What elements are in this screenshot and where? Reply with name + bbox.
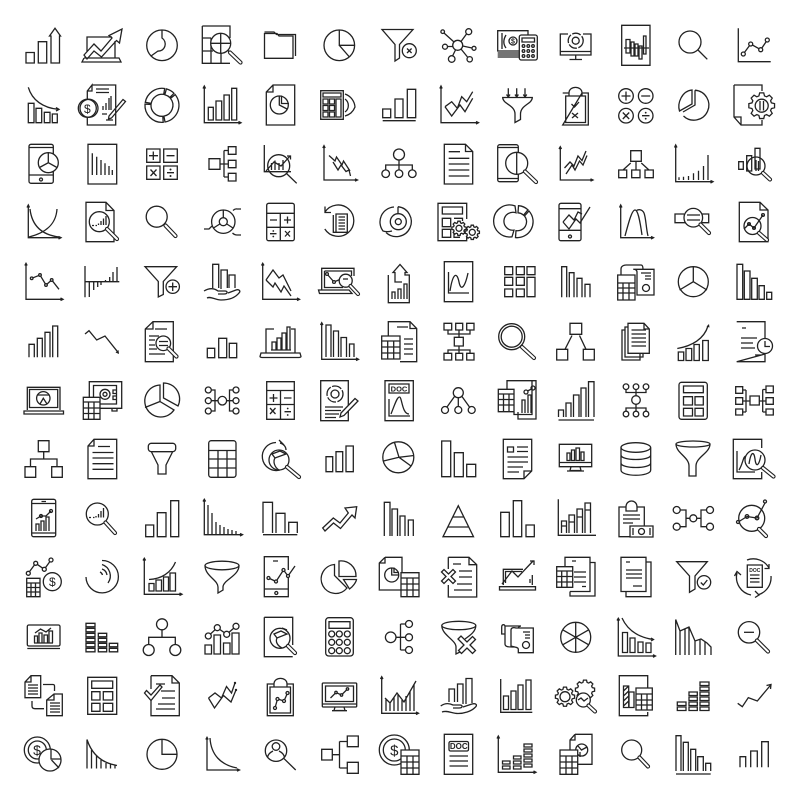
icon: falling curve chart [617, 618, 656, 657]
icon: funnel with check [677, 562, 711, 592]
icon: funnel with cross [382, 30, 416, 61]
icon: segmented donut ring [494, 205, 533, 238]
icon: three bar chart [207, 338, 237, 358]
icon: node branches [673, 506, 714, 530]
icon: checklist document [144, 676, 179, 716]
icon: rising line arrow [738, 684, 771, 707]
icon: coin with pie: $ [33, 742, 41, 758]
icon: calculator tiles [88, 677, 117, 714]
icon: DOC report with curve [385, 381, 413, 421]
icon: funnel [676, 441, 710, 476]
icon: monitor with donut [560, 33, 591, 60]
icon: three descending bars with baseline [263, 502, 297, 535]
icon: wheel chart [561, 622, 591, 652]
icon: exploded pie chart [321, 561, 356, 593]
icon: network hub [441, 29, 476, 62]
icon: gears with magnifier [555, 680, 595, 712]
icon: bar chart with baseline [383, 89, 416, 121]
icon: line chart falling [25, 263, 63, 300]
icon: document with magnifier [86, 202, 117, 242]
icon: stacked bar chart [558, 499, 596, 535]
icon: text document [444, 144, 473, 184]
icon: double trend chart [440, 86, 478, 124]
icon: calculator with tiles [679, 382, 707, 419]
icon: calculator with report [618, 265, 654, 300]
icon: hierarchy squares [322, 736, 358, 773]
icon: keypad calculator [326, 618, 353, 656]
icon: node tree branches [385, 620, 412, 654]
icon: rising spike chart [674, 145, 713, 183]
icon: document with pie and table [379, 557, 419, 597]
icon: magnifier [679, 31, 707, 59]
icon: laptop with trend [500, 560, 536, 590]
icon: donut chart [147, 30, 177, 61]
icon: funnel with X [442, 621, 476, 654]
icon: tall descending bars [442, 441, 476, 477]
icon: bars with magnifier [739, 148, 770, 180]
icon: pyramid [443, 506, 474, 537]
icon: laptop with bars [260, 327, 301, 358]
icon: clipboard with check and cross [563, 87, 588, 125]
icon: pie chart with wedge [679, 90, 709, 120]
icon: spreadsheet with document [382, 322, 417, 362]
icon: report with hatched bar and table [619, 676, 652, 716]
icon: report with curve magnifier [733, 439, 774, 479]
icon: DOC report with curve: DOC [391, 384, 408, 394]
icon: descending closed bars [737, 264, 772, 299]
icon: stacked pages [621, 557, 651, 597]
icon: tree with circles [442, 388, 475, 414]
icon: calculator coin and chart: $ [49, 575, 56, 589]
icon: magnifier with dots [86, 503, 115, 533]
icon: document cycle: DOC [749, 568, 761, 574]
icon: exploded pie [145, 383, 180, 417]
icon: large magnifier [499, 324, 534, 358]
icon: phone with growth chart [32, 499, 56, 537]
icon: funnel with lid [148, 443, 176, 474]
icon: three ascending bars [146, 501, 179, 537]
icon: report with pencil [321, 381, 358, 421]
icon: monitor with chart [322, 683, 357, 711]
icon: folder [264, 32, 296, 58]
icon: double zigzag [208, 682, 237, 708]
icon: database cylinder [621, 443, 651, 475]
icon: magnifier [622, 740, 648, 766]
icon: document with curve chart [444, 262, 473, 302]
icon: area chart with arrow [380, 677, 418, 715]
icon: document cycle [734, 559, 771, 598]
icon: laptop with pie [24, 387, 64, 414]
icon: triangle flow squares [557, 323, 594, 360]
icon: pie chart with slices [383, 442, 414, 473]
icon: dual falling trend chart [262, 263, 300, 300]
icon: descending bars [384, 502, 413, 536]
icon: ascending open bars [29, 326, 58, 357]
icon: hand holding bars [204, 264, 240, 300]
icon: coin with table: $ [390, 742, 399, 760]
icon: line chart with nodes [738, 28, 771, 62]
icon: document with table [560, 734, 592, 774]
icon: coin with table [379, 735, 419, 774]
icon: document with X [442, 557, 477, 597]
icon: rounded table [209, 441, 236, 477]
icon: safe with calculator [83, 382, 122, 419]
icon: document with clock [737, 322, 772, 362]
icon: display with bars and line [27, 625, 60, 648]
icon: bold rising arrow [323, 507, 357, 531]
icon: bar chart with line overlay [205, 623, 239, 654]
icon: chart under magnifier [264, 145, 297, 183]
icon: open bars descending [562, 267, 590, 297]
icon: falling trend chart [323, 146, 358, 181]
icon: magnifier thick handle [146, 206, 176, 236]
icon: phone with pie chart [29, 144, 58, 183]
icon: three mixed bars [501, 501, 534, 537]
icon: tree diagram with circles [623, 384, 649, 417]
icon: area spikes [676, 620, 711, 655]
icon: stacked documents [622, 323, 649, 360]
icon: growth curve and bars [677, 324, 710, 360]
icon: phone with trends [559, 203, 590, 241]
icon: table with magnifier [202, 26, 240, 63]
icon: pie with three slices [678, 267, 708, 297]
icon: document with upward arrow [388, 264, 409, 303]
icon: pie chart [324, 30, 355, 61]
icon: donut with connectors [204, 209, 241, 235]
icon: decay curve spikes [87, 740, 117, 768]
icon: scroll and report [502, 625, 533, 653]
icon: ascending bars with baseline [558, 382, 594, 420]
icon: concentric target [380, 207, 411, 237]
icon: stacked chart on axes [497, 736, 536, 774]
icon: DOC report [444, 734, 473, 774]
icon: organisation chart with circles [382, 149, 416, 178]
icon: node tree with circles [205, 387, 239, 414]
icon: magnifier with minus over cards [675, 208, 709, 233]
icon: funnel with plus [145, 267, 179, 297]
icon: three bars [326, 446, 353, 472]
icon: document with gear [734, 85, 775, 125]
icon: invoice, coin and pencil [78, 85, 126, 125]
icon: table and bar report [498, 381, 536, 419]
icon: document refresh [325, 205, 354, 236]
icon: positive and negative spikes [85, 266, 119, 297]
icon: org chart with squares [25, 441, 62, 477]
icon: segmented donut [145, 88, 179, 122]
icon: rising trend chart [559, 147, 593, 181]
icon: coin with pie [24, 737, 61, 771]
icon: calculator coin and chart [26, 558, 61, 597]
icon: invoice, coin and pencil: $ [84, 102, 91, 116]
icon: flow chart squares [619, 151, 653, 178]
icon: magnifier with line chart [736, 500, 766, 536]
icon: document with candlestick chart [622, 25, 650, 65]
icon: stacked blocks descending [86, 623, 118, 652]
icon: falling line arrow [85, 331, 119, 354]
icon: decay spikes on axis [203, 499, 242, 536]
icon: bell curves chart [620, 205, 654, 239]
icon: report with pie magnifier [264, 617, 295, 657]
icon: calculator with gears [438, 203, 479, 241]
icon: monitor with bars [559, 444, 592, 471]
icon: DOC report: DOC [450, 742, 468, 751]
icon: money and calculator [498, 31, 537, 60]
icon: tile grid [505, 267, 535, 297]
icon: calculator and partial donut [321, 91, 355, 119]
icon: pie with magnifier [262, 440, 299, 477]
icon: document [88, 439, 117, 479]
icon: document with pie [266, 85, 295, 125]
icon: crossing curves chart [27, 205, 61, 239]
icon: block diagram [444, 323, 474, 360]
icon: hierarchy diagram [209, 147, 236, 181]
icon: documents exchange [25, 676, 62, 716]
icon: laptop with rising arrow [82, 29, 122, 62]
icon: calculator operator keys [147, 149, 177, 179]
icon: hand with bars [441, 678, 476, 714]
icon: calculator [267, 382, 294, 419]
icon: three open bars [740, 742, 768, 767]
icon: clipboard with chart [267, 678, 293, 716]
icon: calculator [267, 203, 294, 241]
icon: laptop with magnifier [318, 268, 358, 294]
icon: bar chart with axes [203, 86, 241, 124]
icon: tablet with line chart [264, 557, 295, 597]
icon: document with chart magnifier [739, 202, 768, 242]
icon: report with magnifier [145, 322, 176, 362]
icon: clipboard with money [619, 501, 653, 537]
icon: magnifier with minus [738, 622, 768, 652]
icon: quarter pie [147, 739, 177, 769]
icon: descending bars with baseline [676, 736, 711, 774]
icon: falling curve and bars [28, 87, 59, 123]
icon: money and calculator: $ [511, 38, 515, 46]
icon: table and document stack [557, 557, 595, 596]
icon: spiral arcs [86, 560, 118, 593]
icon: bars with growth curve [143, 558, 182, 596]
icon: article document [503, 439, 532, 479]
icon: branching block diagram [736, 386, 773, 415]
icon: document with declining lines [88, 144, 117, 184]
icon: funnel with arrows [503, 88, 532, 122]
icon: math operators in circles [619, 89, 653, 123]
icon: stacked ascending blocks [677, 682, 709, 710]
icon: bar chart on axes [501, 679, 532, 712]
icon: magnifier with person [265, 740, 296, 770]
icon: growth bars with arrow [26, 28, 60, 63]
icon: phone with magnifier [498, 145, 536, 182]
icon: descending bars on axis [320, 323, 358, 360]
icon: decay curve on axes [206, 737, 240, 771]
icon: wide funnel [205, 561, 239, 593]
icon: org chart with circles [143, 619, 181, 656]
